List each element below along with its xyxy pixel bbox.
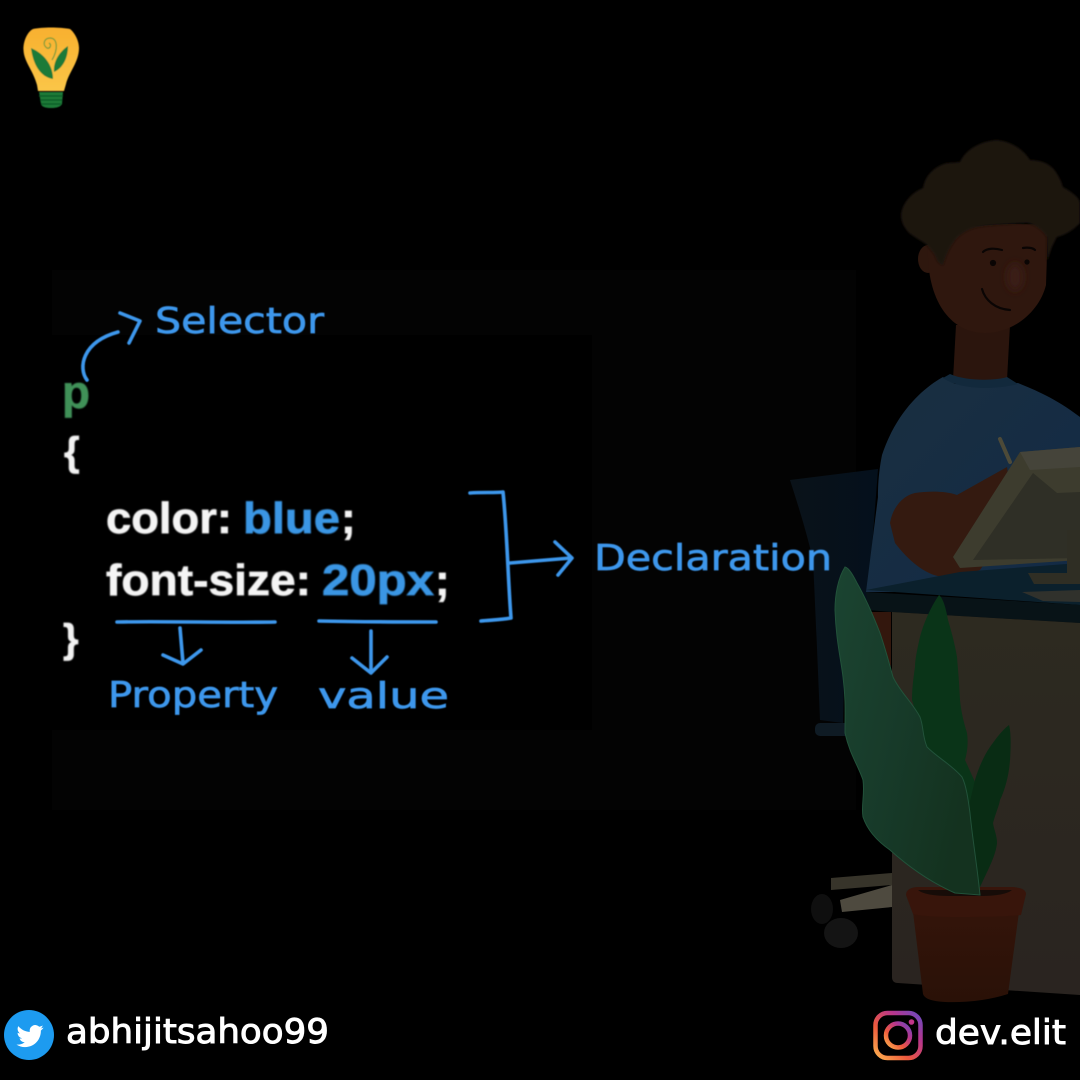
plant: back leaf xyxy=(912,595,983,880)
line: font-size 20px: font-size: xyxy=(106,556,311,605)
annotation: declaration xyxy=(470,492,832,621)
desk top xyxy=(866,563,1080,605)
selector p: p xyxy=(62,366,90,418)
plant: large front leaf xyxy=(835,567,980,895)
person: hair xyxy=(901,140,1080,265)
plant xyxy=(835,567,1011,895)
line: color blue: color: xyxy=(106,494,232,543)
line: font-size 20px xyxy=(106,556,450,605)
icon: instagram xyxy=(876,1013,920,1058)
plant: right leaf xyxy=(968,725,1011,888)
twitter username: abhijitsahoo99 xyxy=(66,1012,329,1052)
person: face xyxy=(928,224,1048,333)
plant pot xyxy=(906,887,1026,1002)
person: nose shading xyxy=(1007,263,1023,291)
opening brace: { xyxy=(64,430,80,474)
monitor xyxy=(953,447,1080,568)
social: twitter handle xyxy=(4,1010,329,1060)
arrow to declaration xyxy=(510,542,572,575)
chair seat xyxy=(815,723,850,736)
person: arm xyxy=(890,467,1015,577)
chair base and wheels xyxy=(811,873,892,948)
desk side panel xyxy=(892,612,1080,995)
label: property: Property xyxy=(108,675,278,716)
label: selector: Selector xyxy=(155,301,324,342)
closing brace: } xyxy=(63,617,79,661)
code snippet xyxy=(62,366,450,661)
annotation: selector xyxy=(83,301,324,380)
person: pen xyxy=(1000,439,1010,462)
annotation: value xyxy=(318,621,449,717)
social: instagram handle xyxy=(876,1013,1066,1058)
person: shirt xyxy=(866,377,1080,592)
arrow to selector xyxy=(83,313,140,380)
bracket xyxy=(470,492,511,621)
line: font-size 20px: 20px xyxy=(322,556,435,605)
panel: code image xyxy=(52,335,592,730)
line: color blue xyxy=(106,494,356,543)
desk edge xyxy=(866,592,1080,623)
icon: light bulb logo xyxy=(23,28,79,108)
chair back xyxy=(790,469,878,723)
instagram username: dev.elit xyxy=(935,1013,1066,1053)
panel: faint backdrop behind the code image xyxy=(52,270,856,810)
line: color blue: blue xyxy=(243,494,340,543)
label: declaration: Declaration xyxy=(594,538,832,579)
person: neck xyxy=(953,325,1010,380)
person: ear xyxy=(918,245,938,273)
line: color blue: ; xyxy=(341,494,356,543)
person: facial features xyxy=(982,248,1035,310)
chair post xyxy=(870,612,891,667)
monitor stand xyxy=(1028,530,1080,584)
desk paper xyxy=(1022,590,1080,602)
label: value: value xyxy=(318,676,449,717)
line: font-size 20px: ; xyxy=(435,556,450,605)
underline and arrow to property xyxy=(117,622,275,664)
icon: twitter xyxy=(4,1010,54,1060)
illustration: developer at a desk xyxy=(790,140,1080,1002)
person: collar xyxy=(943,374,1018,388)
underline and arrow to value xyxy=(319,621,436,673)
annotation: property xyxy=(108,622,278,716)
